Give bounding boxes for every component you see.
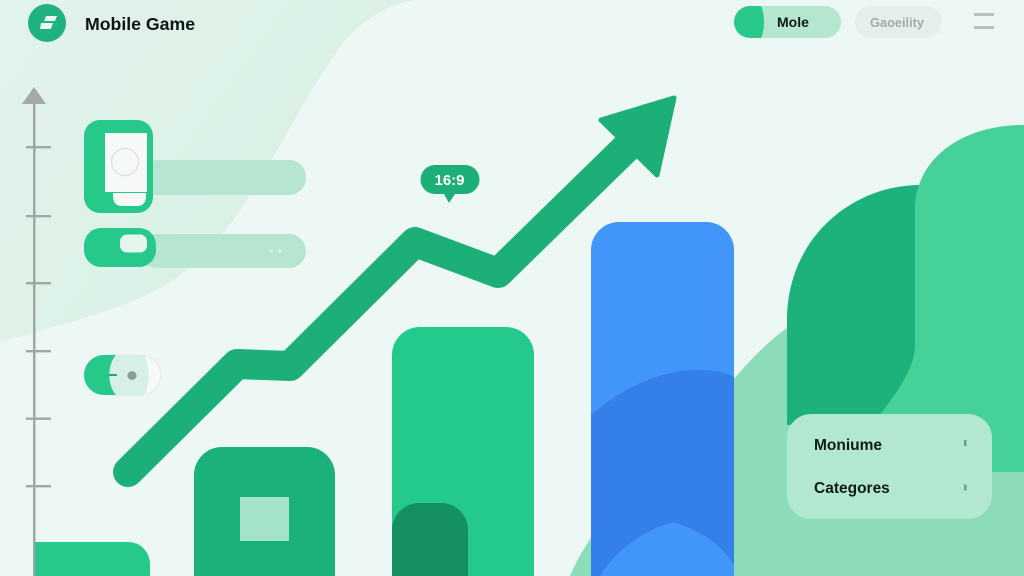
header: menu icon <box>974 13 994 29</box>
info card <box>787 414 992 519</box>
decorative shape: dark green hill <box>787 185 960 425</box>
bar: second dark green <box>194 447 335 576</box>
decorative shape: light green hill <box>872 125 1024 472</box>
callout: 16:9: 16:9 <box>434 172 465 189</box>
callout: 16:9 <box>420 165 480 203</box>
trend arrow <box>128 98 674 472</box>
bar: first green <box>35 542 150 576</box>
header: active toggle <box>734 6 841 38</box>
card row: volume: Moniume <box>814 437 882 454</box>
legend row 3: dial icon <box>84 355 161 395</box>
header: active toggle: Mole <box>777 14 809 30</box>
card row: categories: Categores <box>814 480 890 497</box>
header: logo icon <box>28 4 66 42</box>
decorative blob: lower right <box>570 300 1024 576</box>
legend row 1: bar <box>140 160 306 195</box>
decorative blob: top left <box>0 0 412 342</box>
header: title: Mobile Game <box>85 14 195 34</box>
y axis with ticks <box>22 87 51 576</box>
legend row 2: toggle icon <box>84 228 156 267</box>
header: inactive toggle <box>855 6 942 38</box>
bar: third green <box>392 327 534 576</box>
legend row 1: phone icon <box>84 120 153 213</box>
header: inactive toggle: Gaoeility <box>870 15 925 30</box>
legend row 2: bar <box>140 234 306 268</box>
bar: fourth blue <box>591 222 734 576</box>
